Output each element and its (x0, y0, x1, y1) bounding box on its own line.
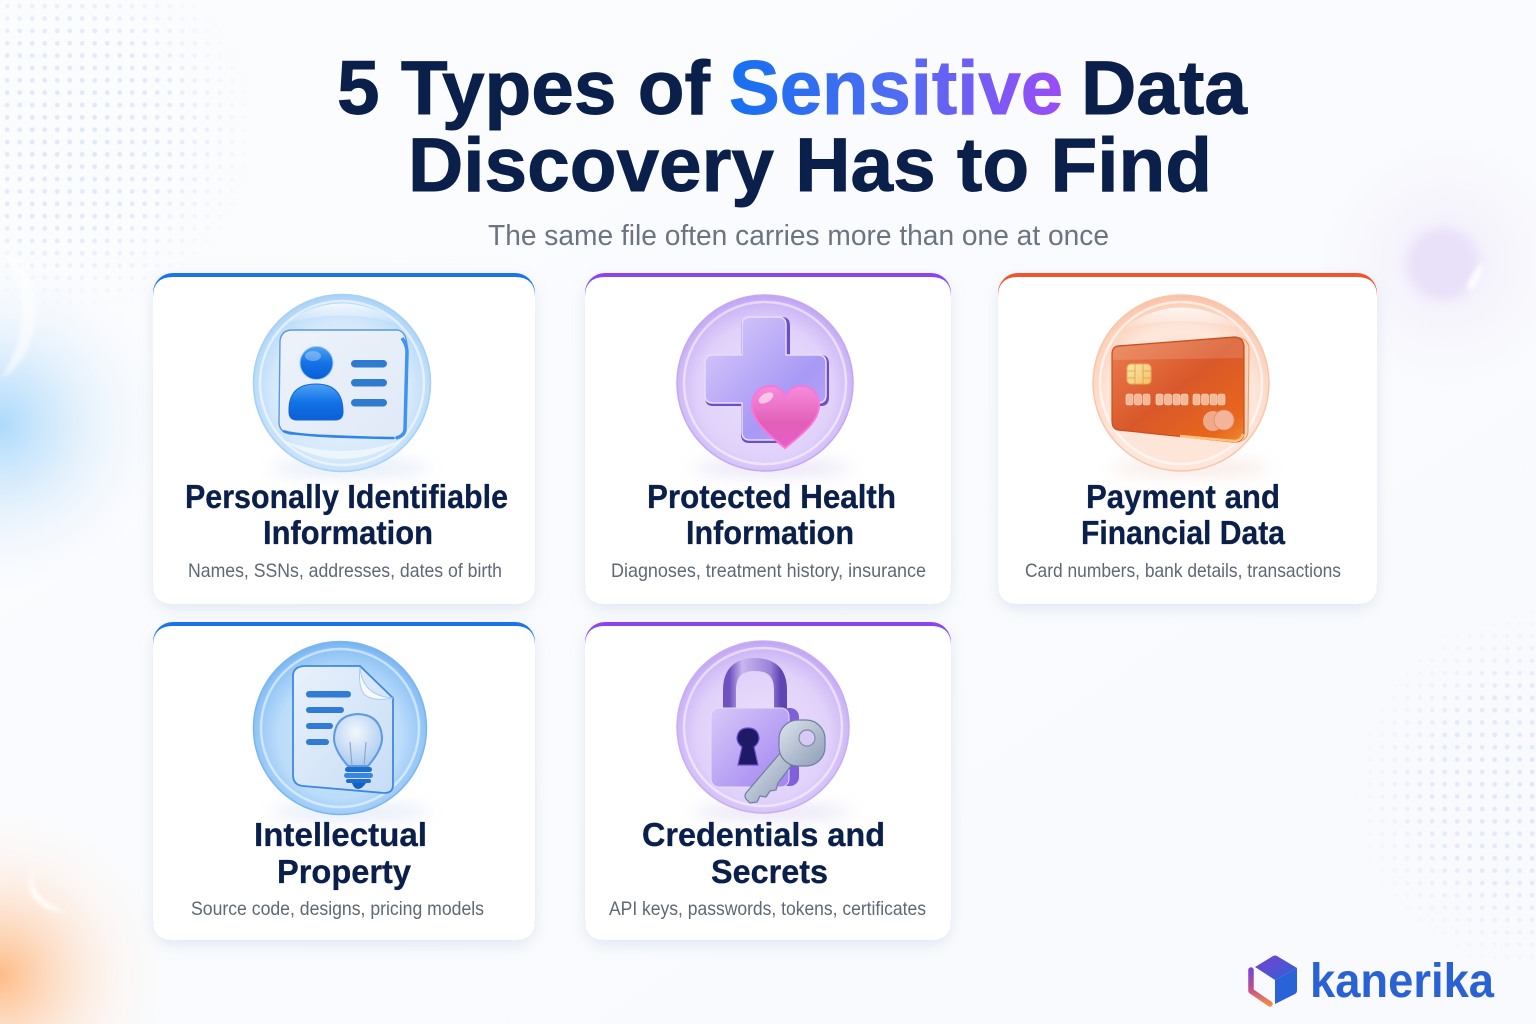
title: Discovery Has to Find (408, 123, 1212, 208)
panel: Payment and Financial Data (998, 273, 1377, 604)
heading (185, 478, 508, 551)
heading (647, 478, 896, 551)
heading: Personally Identifiable (185, 478, 508, 515)
description: Diagnoses, treatment history, insurance (611, 560, 926, 582)
description: Card numbers, bank details, transactions (1025, 560, 1341, 582)
heading: Payment and (1086, 478, 1280, 515)
logo: kanerika: kanerika (1310, 955, 1494, 1008)
heading: Financial Data (1081, 514, 1286, 551)
heading: Intellectual (254, 816, 427, 853)
icon: ID card (254, 294, 430, 475)
heading (1081, 478, 1286, 551)
title: Sensitive (729, 46, 1063, 131)
heading (642, 816, 885, 890)
heading: Secrets (711, 853, 828, 890)
icon: padlock and key (677, 641, 852, 819)
title: Data (1081, 46, 1248, 131)
heading: Property (277, 853, 412, 890)
heading (254, 816, 427, 890)
panel: Intellectual Property (153, 622, 535, 940)
title: 5 Types of (337, 46, 711, 131)
heading: Information (263, 514, 433, 551)
description: Names, SSNs, addresses, dates of birth (188, 560, 502, 582)
panel: Credentials and Secrets (585, 622, 951, 940)
icon: document and light bulb (254, 642, 430, 819)
description: API keys, passwords, tokens, certificates (609, 898, 926, 920)
heading: Protected Health (647, 478, 896, 515)
panel: Protected Health Information (585, 273, 951, 604)
panel: Personally Identifiable Information (153, 273, 535, 604)
icon: cube (1251, 956, 1297, 1004)
icon: medical cross and heart (677, 295, 853, 475)
subtitle: The same file often carries more than one at once (488, 220, 1109, 252)
heading: Information (686, 514, 854, 551)
key (745, 720, 825, 803)
description: Source code, designs, pricing models (191, 898, 484, 920)
icon: credit card (1093, 295, 1270, 475)
title (337, 46, 1248, 208)
heading: Credentials and (642, 816, 885, 853)
